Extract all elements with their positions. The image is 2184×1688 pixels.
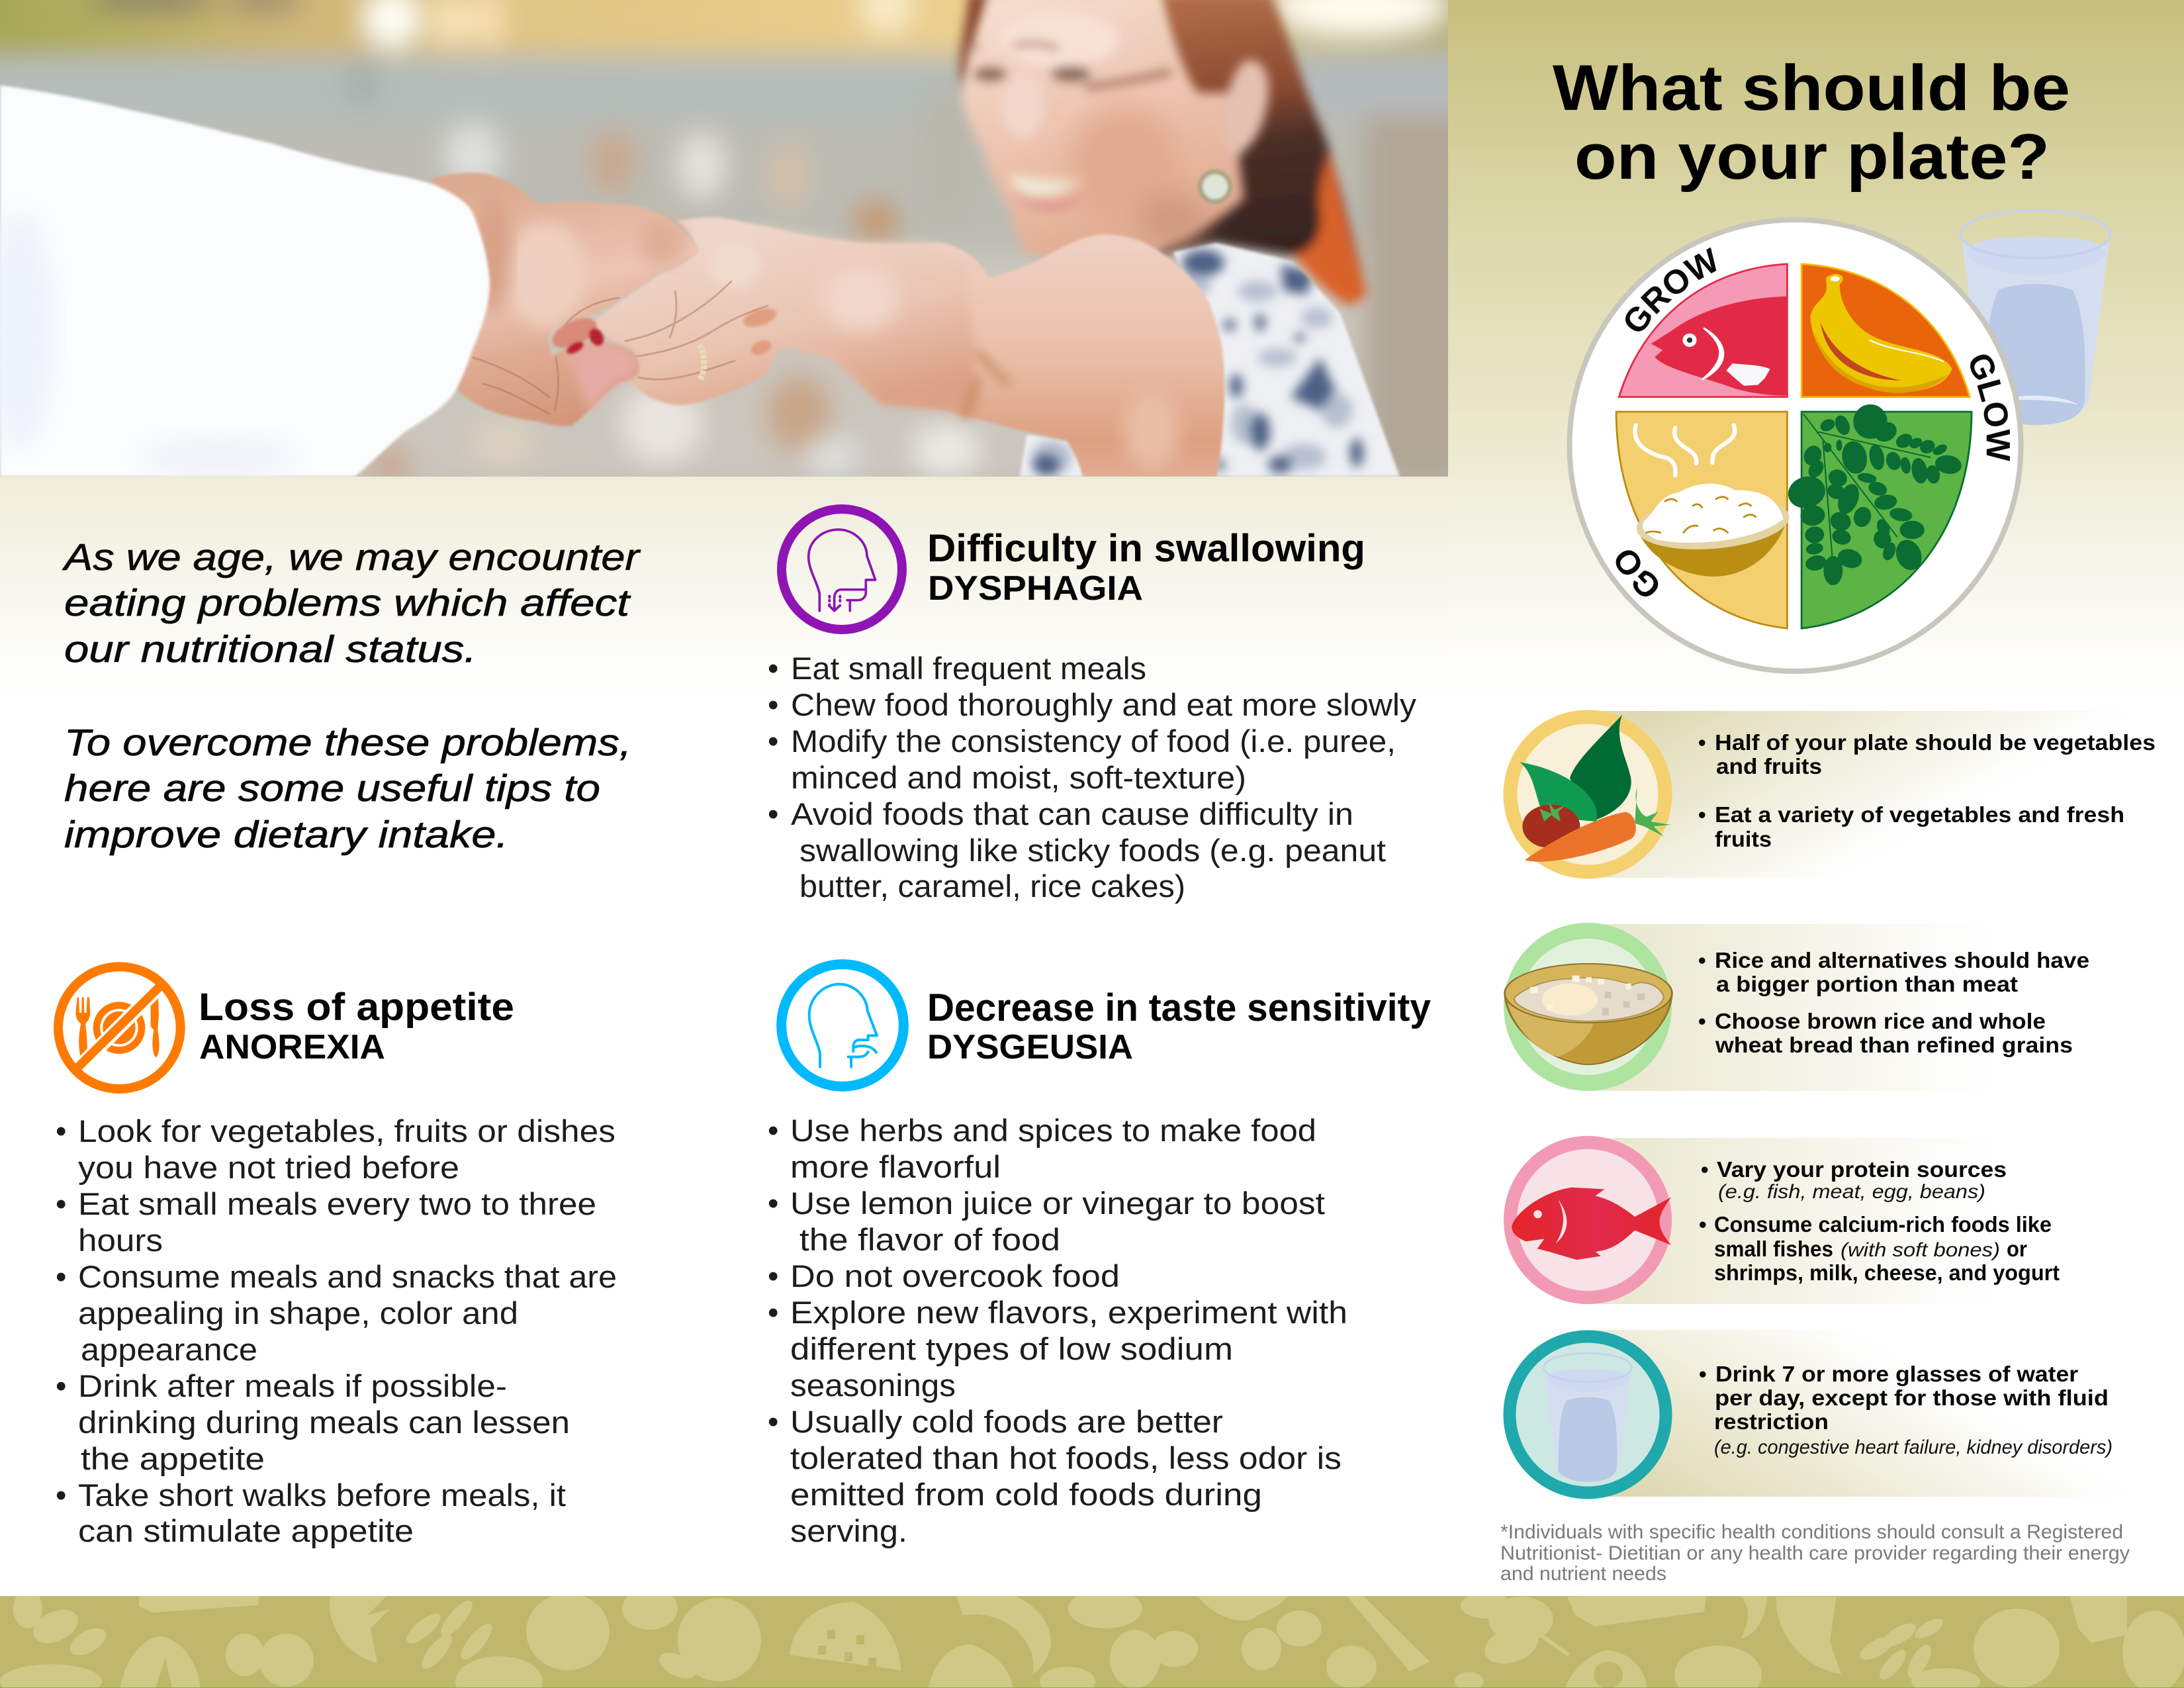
photo: woman's upper arm and forearm (768, 227, 1224, 477)
text block: anorexia tips: Consume meals and snacks that are (78, 1259, 617, 1294)
icon: glass of water beside the plate (1960, 211, 2110, 425)
text: rice advice: • (1698, 948, 1706, 972)
plate labels: GROW, GLOW, GO (1616, 248, 2010, 597)
text: protein advice: Vary your protein sources (1717, 1157, 2007, 1182)
text block: anorexia tips: • (56, 1113, 66, 1149)
heading: difficulty in swallowing: DYSPHAGIA (928, 569, 1143, 608)
text block: anorexia tips: Take short walks before meals, it (78, 1477, 566, 1513)
text block: anorexia tips: appealing in shape, color and (78, 1295, 518, 1331)
text: rice advice: wheat bread than refined grains (1715, 1033, 2073, 1057)
photo: face (962, 0, 1269, 261)
heading: difficulty in swallowing (927, 527, 1365, 608)
footnote (1500, 1521, 2130, 1585)
title: on your plate? (1574, 120, 2050, 193)
text block: anorexia tips: can stimulate appetite (78, 1513, 414, 1548)
text: rice advice (1698, 948, 2089, 1057)
panel: vegetables and fruits advice (1510, 711, 2156, 878)
text: protein advice: • (1699, 1212, 1707, 1237)
panel: water advice (1510, 1330, 2138, 1497)
text block: dysphagia tips: Eat small frequent meals (791, 651, 1146, 686)
text: vegetables advice: fruits (1715, 827, 1772, 851)
text: protein advice: • (1701, 1157, 1709, 1182)
text: protein advice: (e.g. fish, meat, egg, beans) (1718, 1181, 1985, 1203)
text block: anorexia tips (56, 1113, 617, 1548)
heading: decrease in taste sensitivity (927, 986, 1431, 1066)
photo: hair (960, 0, 1367, 306)
plate section: grow, fish (1619, 264, 1787, 397)
text block: dysphagia tips: Modify the consistency of food (i.e. puree, (791, 724, 1396, 759)
icon: loss of appetite, crossed plate and cutlery (58, 966, 181, 1089)
icon: dysphagia head with swallowing arrow (782, 509, 902, 630)
plate labels: GROW, GLOW, GO: GLOW (1970, 355, 2010, 461)
text: rice advice: Rice and alternatives should have (1715, 948, 2089, 972)
text block: dysgeusia tips: Do not overcook food (790, 1258, 1120, 1293)
footnote: *Individuals with specific health conditions should consult a Registered (1500, 1521, 2123, 1543)
text block: anorexia tips: drinking during meals can lessen (78, 1405, 570, 1440)
text block: anorexia tips: Look for vegetables, fruits or dishes (78, 1113, 615, 1149)
icon: dysgeusia head with tongue (782, 964, 903, 1086)
plate labels: GROW, GLOW, GO: GO (1616, 550, 1659, 597)
intro text: our nutritional status. (64, 628, 477, 671)
text block: anorexia tips: appearance (81, 1332, 257, 1367)
text block: dysphagia tips (768, 651, 1417, 904)
text block: dysgeusia tips: Use herbs and spices to make food (790, 1113, 1316, 1148)
panel: right column gradient background (1448, 0, 2184, 702)
text: protein advice: small fishes (1714, 1237, 1833, 1261)
text block: anorexia tips: • (56, 1368, 66, 1403)
photo: earring (1198, 169, 1232, 204)
panel: protein advice (1510, 1138, 2060, 1304)
plate section: glow, moringa leaves (1785, 406, 1972, 628)
photo: palm creases (473, 298, 619, 414)
text block: dysphagia tips: butter, caramel, rice cakes) (799, 868, 1185, 904)
plate section: go, rice bowl (1616, 412, 1792, 628)
text: protein advice (1699, 1157, 2060, 1285)
text block: dysgeusia tips: • (768, 1295, 778, 1330)
text block: dysphagia tips: • (768, 651, 778, 686)
text block: dysgeusia tips: • (768, 1113, 778, 1148)
text block: anorexia tips: the appetite (81, 1441, 265, 1476)
text block: anorexia tips: • (56, 1477, 66, 1513)
footnote: and nutrient needs (1500, 1563, 1666, 1585)
text block: dysphagia tips: • (768, 724, 778, 759)
text block: dysgeusia tips: different types of low sodium (790, 1331, 1233, 1366)
text block: dysgeusia tips: Use lemon juice or vinegar to boost (790, 1186, 1325, 1221)
text block: dysgeusia tips: the flavor of food (799, 1222, 1060, 1257)
text: water advice: restriction (1714, 1409, 1829, 1434)
icon: glass of water (1510, 1336, 1666, 1493)
text: vegetables advice: • (1698, 802, 1706, 827)
photo: woman's hand (592, 217, 789, 405)
plate section: glow, banana (1801, 264, 1970, 397)
text block: dysphagia tips: Avoid foods that can cause difficulty in (791, 796, 1353, 831)
intro text: To overcome these problems, (64, 722, 631, 764)
footnote: Nutritionist- Dietitian or any health care provider regarding their energy (1500, 1542, 2130, 1564)
text block: dysphagia tips: • (768, 796, 778, 831)
photo: fingertips and painted nails (548, 312, 607, 356)
text block: dysgeusia tips: more flavorful (790, 1149, 1001, 1184)
text block: dysphagia tips: swallowing like sticky foods (e.g. peanut (799, 833, 1386, 868)
panel: cream band under the photo (0, 477, 1461, 702)
text: vegetables advice: Half of your plate should be vegetables (1715, 730, 2156, 755)
text: water advice: (e.g. congestive heart failure, kidney disorders) (1714, 1436, 2113, 1458)
text block: dysphagia tips: Chew food thoroughly and eat more slowly (791, 687, 1417, 722)
text block: dysphagia tips: minced and moist, soft-texture) (791, 760, 1246, 795)
photo: dress (993, 225, 1456, 490)
intro text (62, 536, 641, 856)
text: vegetables advice: Eat a variety of vegetables and fresh (1715, 802, 2124, 827)
photo: wedding ring (700, 345, 704, 379)
photo: white sleeve (0, 85, 490, 477)
text: rice advice: Choose brown rice and whole (1715, 1009, 2046, 1033)
text block: dysgeusia tips: Explore new flavors, experiment with (790, 1295, 1347, 1330)
text block: anorexia tips: you have not tried before (78, 1150, 459, 1185)
text: vegetables advice (1698, 730, 2156, 851)
text block: dysgeusia tips: tolerated than hot foods, less odor is (790, 1440, 1342, 1476)
text block: dysgeusia tips: • (768, 1186, 778, 1221)
text: water advice (1699, 1362, 2113, 1458)
text: water advice: • (1699, 1362, 1707, 1386)
text: protein advice: or (2007, 1237, 2027, 1261)
text block: anorexia tips: • (56, 1186, 66, 1221)
text block: anorexia tips: hours (78, 1223, 163, 1258)
text: water advice: Drink 7 or more glasses of water (1715, 1362, 2078, 1386)
text block: anorexia tips: Eat small meals every two to three (78, 1186, 596, 1221)
text: protein advice: (with soft bones) (1841, 1239, 2000, 1261)
text: rice advice: a bigger portion than meat (1716, 972, 2018, 996)
text block: dysphagia tips: • (768, 687, 778, 722)
title: What should be (1553, 52, 2070, 124)
text: protein advice: Consume calcium-rich foods like (1714, 1212, 2052, 1237)
photo: cheek and neck shading (1069, 106, 1205, 245)
text: vegetables advice: and fruits (1716, 754, 1822, 778)
icon: vegetables (1510, 715, 1670, 872)
text block: dysgeusia tips: serving. (790, 1513, 907, 1548)
heading: difficulty in swallowing: Difficulty in swallowing (927, 527, 1365, 570)
text: protein advice: shrimps, milk, cheese, and yogurt (1714, 1260, 2060, 1285)
icon: red fish (1510, 1143, 1671, 1297)
text block: anorexia tips: Drink after meals if possible- (78, 1368, 507, 1403)
text block: anorexia tips: • (56, 1259, 66, 1294)
heading: loss of appetite: ANOREXIA (199, 1028, 385, 1066)
heading: loss of appetite (199, 986, 514, 1066)
text block: dysgeusia tips (768, 1113, 1347, 1548)
text block: dysgeusia tips: seasonings (790, 1368, 956, 1403)
text: water advice: per day, except for those with fluid (1715, 1385, 2109, 1410)
text: rice advice: • (1698, 1009, 1706, 1033)
photo: man's hand (430, 173, 698, 426)
intro text: As we age, we may encounter (62, 536, 641, 579)
intro text: improve dietary intake. (64, 814, 508, 856)
panel: rice and alternatives advice (1505, 924, 2089, 1091)
heading: decrease in taste sensitivity: DYSGEUSIA (927, 1028, 1133, 1066)
title (1553, 52, 2070, 193)
intro text: eating problems which affect (64, 582, 631, 624)
text block: dysgeusia tips: emitted from cold foods during (790, 1477, 1262, 1512)
icon: rice bowl (1505, 931, 1672, 1083)
heading: decrease in taste sensitivity: Decrease in taste sensitivity (927, 986, 1431, 1029)
text: vegetables advice: • (1698, 730, 1706, 755)
footer food pattern band (0, 1587, 2184, 1688)
text block: dysgeusia tips: • (768, 1258, 778, 1293)
heading: loss of appetite: Loss of appetite (199, 986, 514, 1029)
intro text: here are some useful tips to (64, 767, 600, 810)
photo: finger creases (625, 281, 768, 379)
text block: dysgeusia tips: • (768, 1404, 778, 1439)
text block: dysgeusia tips: Usually cold foods are better (790, 1404, 1223, 1439)
plate (1567, 217, 2024, 674)
plate labels: GROW, GLOW, GO: GROW (1625, 248, 1717, 332)
photo: two people holding hands (0, 0, 1482, 490)
